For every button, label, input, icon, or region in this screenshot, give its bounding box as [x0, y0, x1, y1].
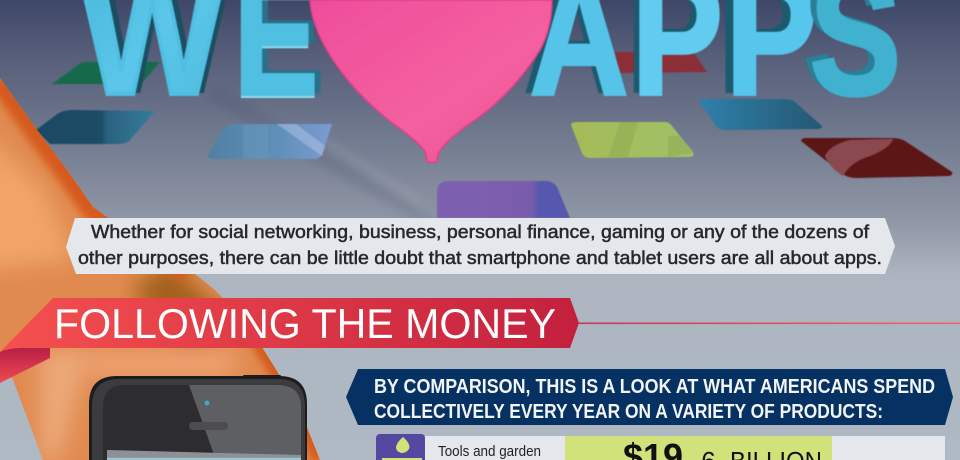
- intro text band: [66, 218, 895, 274]
- app tile: right blue: [699, 99, 822, 130]
- camera: [205, 401, 209, 405]
- value block: [565, 436, 832, 460]
- app tile: purple: [437, 181, 570, 218]
- phone bezel: [92, 379, 305, 460]
- row panel: [425, 436, 945, 460]
- app tile: lime: [571, 122, 693, 158]
- title: WE heart APPS: [80, 0, 901, 132]
- app tile: mid blue: [207, 124, 332, 159]
- phone body: [89, 376, 307, 460]
- comparison banner: [346, 369, 953, 425]
- ribbon body: [0, 298, 579, 352]
- app tile: dark blue: [36, 110, 155, 144]
- light streak: [205, 88, 440, 226]
- app tile: green: [52, 62, 160, 84]
- icon: plant: [376, 434, 425, 460]
- heart: [310, 0, 552, 162]
- ribbon fold: [0, 348, 50, 383]
- phone face dark: [103, 385, 301, 460]
- app tile: pink behind letters: [727, 52, 739, 73]
- phone face gloss: [189, 385, 301, 460]
- app tile: maroon: [801, 138, 952, 178]
- intro text line 1: Whether for social networking, business, personal finance, gaming or any of the dozens of: [91, 221, 870, 242]
- section heading ribbon: [0, 298, 579, 383]
- phone: [89, 375, 307, 460]
- intro text line 2: other purposes, there can be little doubt that smartphone and tablet users are all about apps.: [78, 247, 882, 268]
- phone screen: [107, 450, 301, 460]
- hand: [0, 70, 330, 460]
- banner text line 2: COLLECTIVELY EVERY YEAR ON A VARIETY OF PRODUCTS:: [374, 401, 883, 423]
- heading text: FOLLOWING THE MONEY: [54, 300, 556, 347]
- row: tools and garden: [376, 434, 945, 460]
- row label: Tools and garden: [438, 444, 541, 460]
- value text: [623, 436, 822, 460]
- app tile: red behind letters: [615, 52, 707, 73]
- speaker: [189, 422, 228, 430]
- hand shading: [0, 130, 240, 460]
